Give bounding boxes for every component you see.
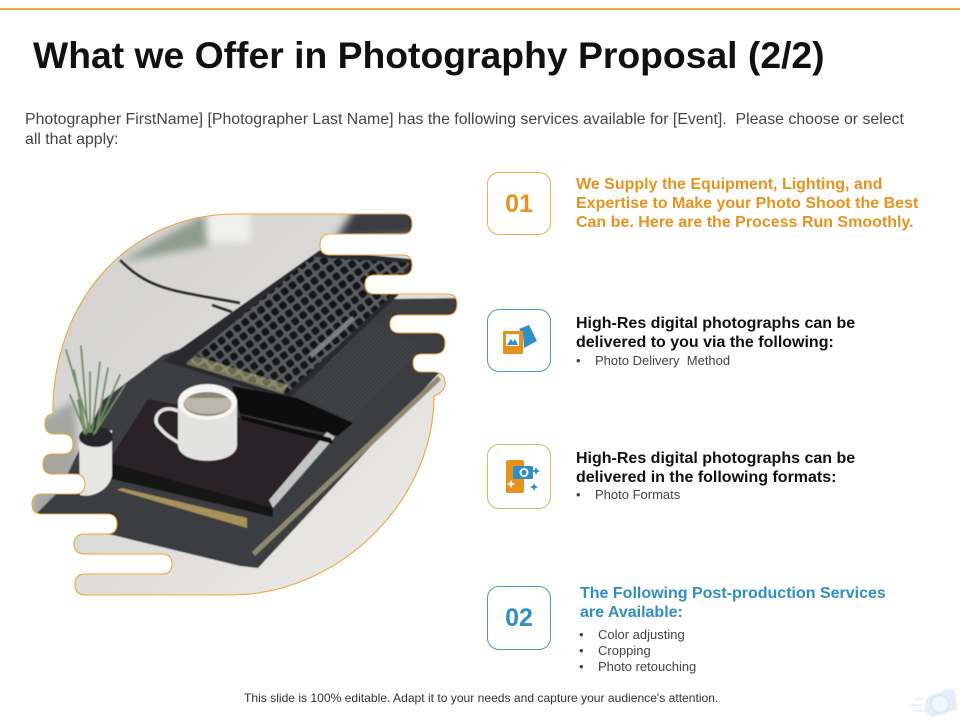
services list: • Color adjusting xyxy=(579,627,685,642)
heading 01 xyxy=(576,176,918,231)
photo blob of desk with keyboard, cup and notebook xyxy=(31,214,458,596)
text block: delivery: delivered to you via the following: xyxy=(576,334,834,351)
icon: camera watermark xyxy=(911,689,958,717)
services list xyxy=(579,627,696,674)
icon badge: photo delivery xyxy=(487,309,551,372)
intro text xyxy=(25,111,904,148)
badge 02 xyxy=(487,586,551,650)
footer note: This slide is 100% editable. Adapt it to your needs and capture your audience's attention. xyxy=(244,691,718,705)
badge 01: 01 xyxy=(505,190,533,218)
text block: formats: delivered in the following formats: xyxy=(576,469,836,486)
text block: delivery xyxy=(576,315,855,368)
text block: formats xyxy=(576,450,855,502)
badge 02: 02 xyxy=(505,604,533,632)
text block: delivery: • Photo Delivery Method xyxy=(576,353,730,368)
heading 02: are Available: xyxy=(580,604,683,621)
heading 01: Expertise to Make your Photo Shoot the Best xyxy=(576,195,918,212)
intro text: Photographer FirstName] [Photographer Last Name] has the following services available for [Event]. Please choose or select xyxy=(25,111,904,128)
heading 01: We Supply the Equipment, Lighting, and xyxy=(576,176,882,193)
services list: • Photo retouching xyxy=(579,659,696,674)
text block: formats: • Photo Formats xyxy=(576,487,680,502)
text block: delivery: High-Res digital photographs can be xyxy=(576,315,855,332)
title: What we Offer in Photography Proposal (2/2) xyxy=(33,34,825,76)
heading 02: The Following Post-production Services xyxy=(580,585,886,602)
icon badge: photo formats xyxy=(487,444,551,509)
intro text: all that apply: xyxy=(25,131,118,148)
heading 02 xyxy=(580,585,886,621)
badge 01 xyxy=(487,172,551,235)
text block: formats: High-Res digital photographs can be xyxy=(576,450,855,467)
heading 01: Can be. Here are the Process Run Smoothly. xyxy=(576,214,914,231)
top accent line xyxy=(0,8,960,10)
services list: • Cropping xyxy=(579,643,651,658)
